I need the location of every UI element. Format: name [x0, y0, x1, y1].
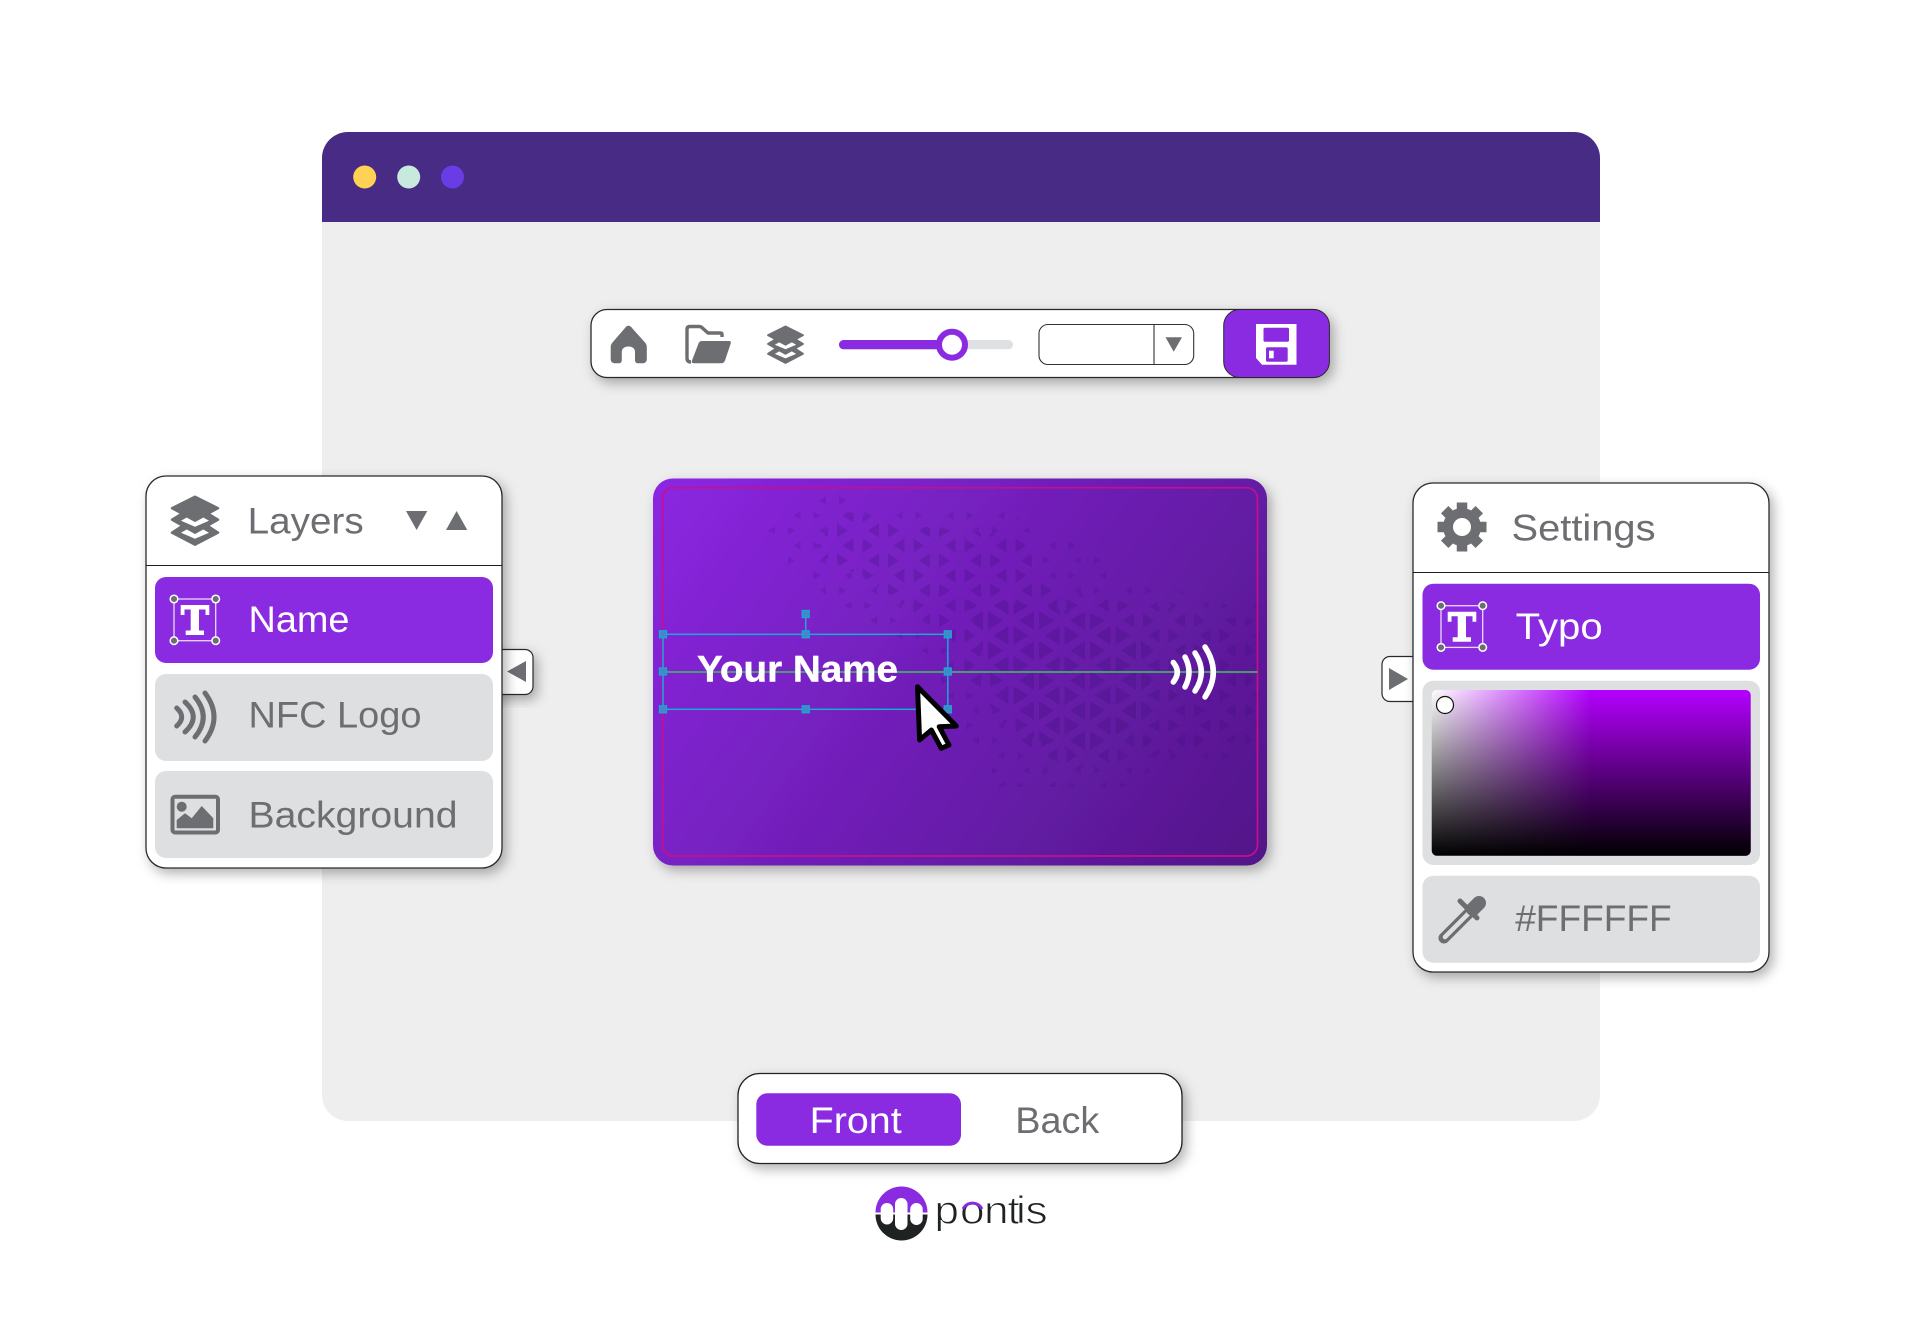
settings collapse tab — [1382, 656, 1435, 702]
window body — [322, 132, 1600, 1121]
NFC Logo label: NFC Logo — [248, 694, 422, 736]
icon: folder — [687, 326, 731, 363]
arrow up — [446, 511, 467, 530]
zoom slider — [839, 332, 1013, 358]
icon: layers — [768, 326, 803, 363]
layers heading: Layers — [248, 500, 364, 541]
slider thumb — [939, 332, 965, 358]
dropdown — [1039, 324, 1194, 364]
icon: gear — [1438, 502, 1486, 552]
panel: settings — [1382, 483, 1769, 972]
violet window dot — [441, 166, 464, 188]
side switcher — [738, 1074, 1182, 1164]
icon: text frame — [1437, 602, 1486, 651]
toolbar — [591, 310, 1329, 378]
name text: Your Name — [697, 649, 898, 690]
settings panel frame — [1413, 483, 1769, 972]
card triangle pattern — [766, 495, 1264, 787]
card background — [653, 478, 1267, 866]
tab arrow left — [507, 661, 526, 682]
Background label: Background — [248, 795, 458, 836]
icon: floppy disk — [1256, 324, 1296, 365]
icon: home — [611, 326, 647, 363]
icon: eyedropper — [1444, 901, 1479, 938]
icon: text frame — [170, 595, 220, 644]
tab arrow right — [1389, 668, 1408, 690]
Front label: Front — [810, 1100, 902, 1141]
business card preview — [653, 478, 1267, 866]
layer row: NFC Logo — [155, 674, 493, 761]
panel: layers — [146, 476, 533, 868]
wordmark accent — [963, 1203, 982, 1209]
Name label: Name — [248, 599, 350, 640]
mint window dot — [397, 166, 420, 188]
dropdown arrow — [1166, 337, 1182, 352]
icon: NFC waves — [1173, 647, 1213, 697]
icon: NFC waves grey — [177, 693, 214, 741]
arrow down — [406, 511, 427, 530]
logo mark — [873, 1186, 929, 1240]
app window — [322, 132, 1600, 1121]
save button — [1224, 310, 1329, 378]
layer row: Name — [155, 577, 493, 663]
toolbar background — [591, 310, 1329, 378]
picker handle — [1436, 696, 1454, 714]
guide line — [662, 671, 1258, 673]
layers panel frame — [146, 476, 502, 868]
logo wordmark: pontis — [934, 1188, 1048, 1232]
layer row: Background — [155, 771, 493, 858]
selection box — [660, 610, 951, 713]
layers collapse tab — [480, 650, 533, 694]
brightness gradient — [1432, 690, 1751, 856]
yellow window dot — [353, 166, 376, 188]
Back label: Back — [1015, 1100, 1100, 1141]
Typo label: Typo — [1516, 606, 1603, 647]
slider fill — [839, 340, 952, 349]
hex value label: #FFFFFF — [1515, 898, 1672, 939]
window title bar — [322, 132, 1600, 222]
saturation gradient — [1432, 690, 1751, 856]
icon: mouse cursor — [918, 687, 956, 748]
icon: image — [172, 797, 218, 832]
color picker — [1422, 681, 1760, 865]
Front button — [756, 1093, 961, 1146]
icon: layers stack — [172, 497, 218, 545]
hex value row — [1422, 876, 1760, 963]
settings heading: Settings — [1512, 507, 1656, 548]
switcher frame — [738, 1074, 1182, 1164]
settings row: Typo — [1422, 584, 1760, 670]
slider track — [839, 340, 1013, 349]
pontis logo — [873, 1186, 1048, 1240]
card safe-area border — [662, 488, 1258, 856]
